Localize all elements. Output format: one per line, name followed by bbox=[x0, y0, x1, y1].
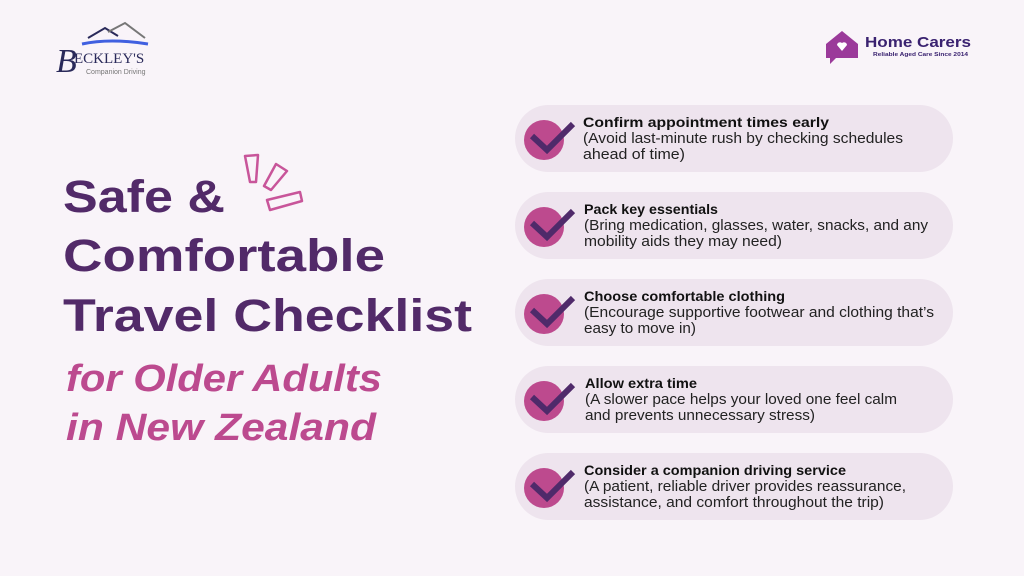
logo: Beckley's: B bbox=[56, 43, 77, 80]
checklist bbox=[515, 105, 953, 520]
logo: Home Carers: Home Carers bbox=[865, 34, 971, 51]
item 3: easy to move in) bbox=[584, 321, 696, 337]
title: Comfortable bbox=[63, 230, 385, 281]
item 5: Consider a companion driving service bbox=[584, 463, 847, 478]
title bbox=[63, 171, 472, 341]
logo: Home Carers: Reliable Aged Care Since 2014 bbox=[873, 52, 968, 58]
subtitle bbox=[66, 358, 382, 449]
item 4: and prevents unnecessary stress) bbox=[585, 408, 815, 424]
item 1 bbox=[515, 105, 953, 172]
item 2: mobility aids they may need) bbox=[584, 234, 782, 250]
item 5 bbox=[515, 453, 953, 520]
item 4 bbox=[515, 366, 953, 433]
title: Safe & bbox=[63, 171, 225, 222]
item 5: (A patient, reliable driver provides reassurance, bbox=[584, 479, 906, 495]
item 2: (Bring medication, glasses, water, snacks, and any bbox=[584, 218, 929, 234]
subtitle: for Older Adults bbox=[66, 358, 382, 400]
item 1: Confirm appointment times early bbox=[583, 115, 830, 130]
item 3: Choose comfortable clothing bbox=[584, 289, 785, 304]
item 2 bbox=[515, 192, 953, 259]
item 3 bbox=[515, 279, 953, 346]
item 4: Allow extra time bbox=[585, 376, 698, 391]
logo: Beckley's bbox=[56, 23, 148, 80]
title: Travel Checklist bbox=[63, 290, 472, 341]
logo: Beckley's: Companion Driving bbox=[86, 69, 146, 76]
item 5: assistance, and comfort throughout the trip) bbox=[584, 495, 884, 511]
logo: Beckley's: ECKLEY'S bbox=[74, 51, 144, 67]
logo: Home Carers bbox=[826, 31, 971, 64]
item 1: (Avoid last-minute rush by checking schedules bbox=[583, 131, 903, 147]
item 4: (A slower pace helps your loved one feel calm bbox=[585, 392, 897, 408]
item 3: (Encourage supportive footwear and clothing that’s bbox=[584, 305, 934, 321]
item 1: ahead of time) bbox=[583, 147, 685, 163]
subtitle: in New Zealand bbox=[66, 407, 377, 449]
icon: sparkle marks bbox=[245, 155, 302, 210]
item 2: Pack key essentials bbox=[584, 202, 718, 217]
